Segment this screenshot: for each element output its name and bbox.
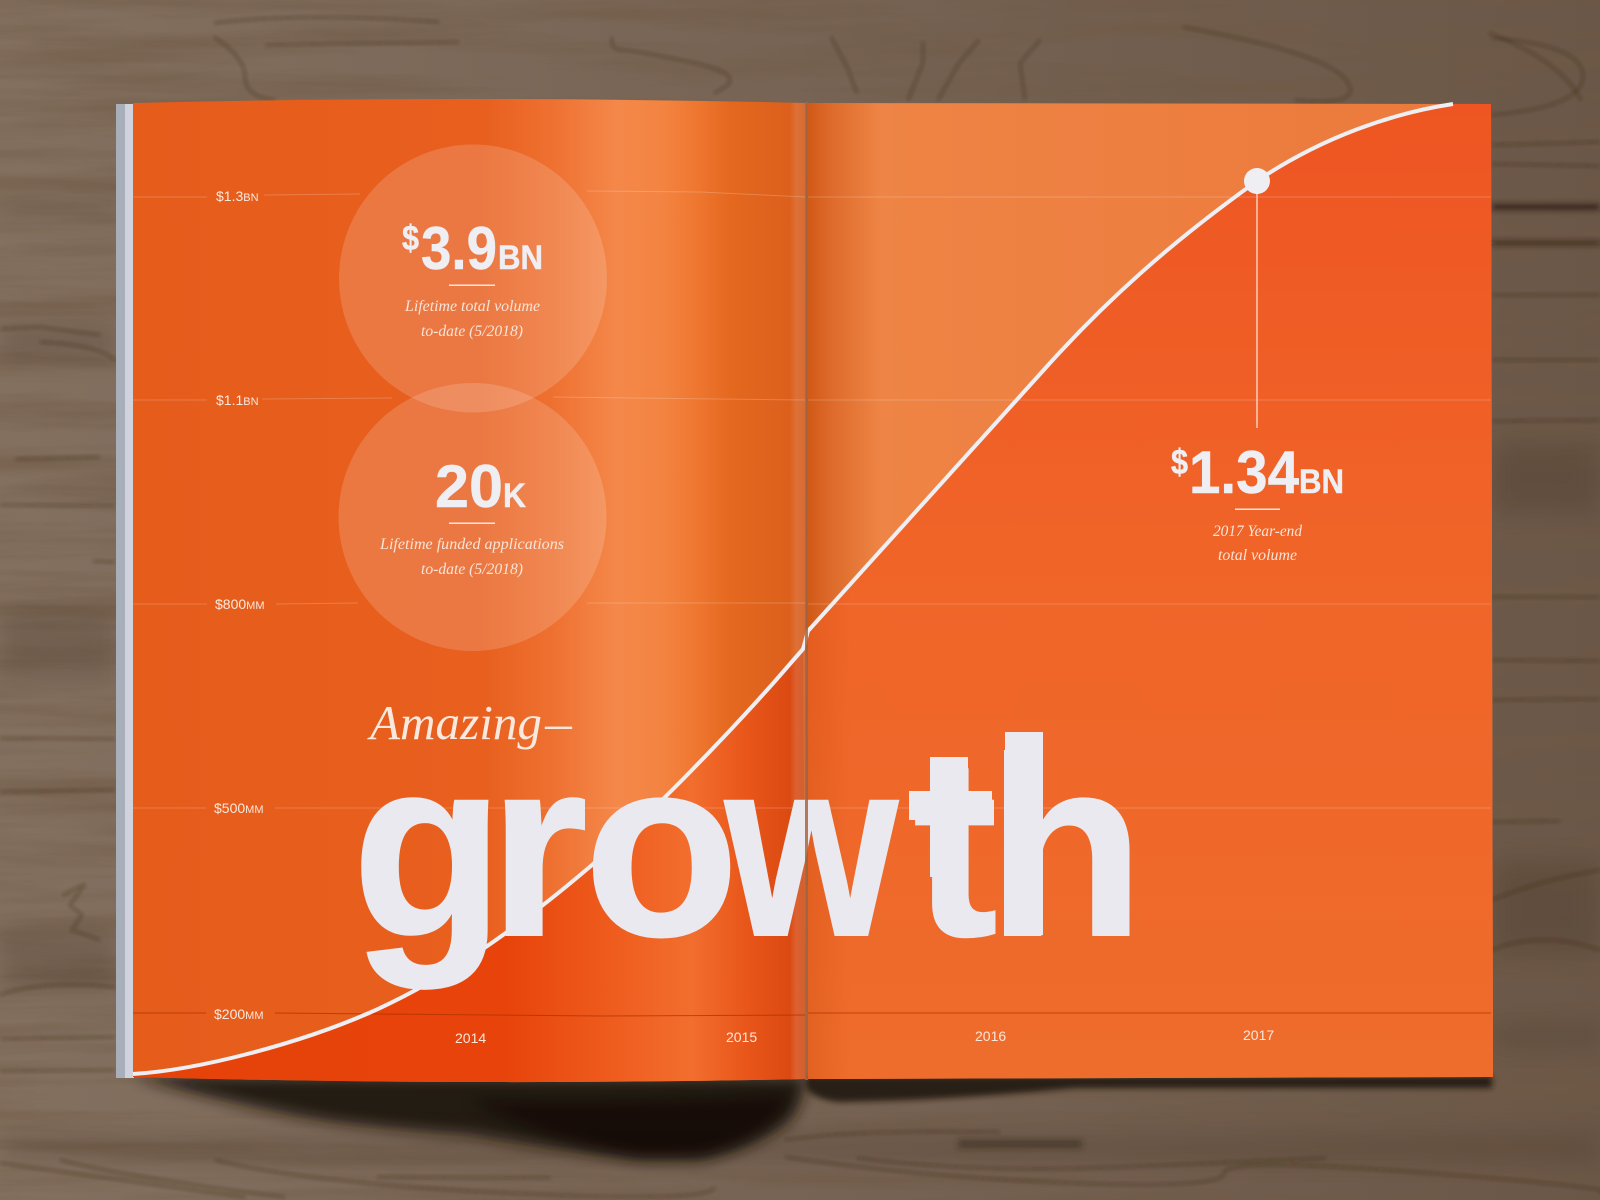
heading: growth: r (489, 705, 588, 989)
stat: $3.9BN lifetime total volume: 3.9 (421, 215, 497, 282)
stat: $3.9BN lifetime total volume: $ (402, 219, 419, 258)
heading: Amazing: — (544, 695, 572, 750)
circle: lifetime funded applications (338, 383, 606, 651)
circle: lifetime total volume (339, 144, 607, 412)
stat: $1.34BN 2017 year-end total volume: $ (1171, 443, 1188, 482)
right page (806, 100, 1500, 1085)
y axis labels: $1.3BN (216, 188, 259, 204)
shadow under the spread (133, 1076, 1492, 1160)
x axis year labels: 2016 (975, 1028, 1006, 1044)
stat: 20K lifetime funded applications: 20 (435, 453, 503, 520)
heading: growth: g (352, 706, 504, 990)
stat: $1.34BN 2017 year-end total volume (1171, 439, 1344, 564)
curve marker dot and stem (1244, 168, 1270, 428)
right page area below curve (808, 100, 1500, 1085)
stat: $1.34BN 2017 year-end total volume: 1.34 (1189, 439, 1300, 506)
stat: 20K lifetime funded applications: Lifetime funded applications (379, 536, 564, 553)
heading: growth: h (987, 706, 1144, 990)
heading: growth (352, 705, 1144, 990)
stat: $3.9BN lifetime total volume: Lifetime total volume (404, 298, 540, 315)
x axis year labels: 2017 (1243, 1027, 1274, 1043)
x axis year labels: 2015 (726, 1029, 757, 1045)
right page background above curve (806, 100, 1496, 1085)
left page area below curve (133, 649, 806, 1090)
stat: $1.34BN 2017 year-end total volume: 2017 Year-end (1213, 523, 1303, 540)
x axis year labels (455, 1027, 1274, 1046)
horizontal grid lines (133, 191, 1491, 1016)
heading: Amazing: Amazing (367, 695, 542, 750)
y axis labels: $200MM (214, 1006, 263, 1022)
gutter shading on right page above curve (808, 103, 866, 628)
left page background above curve (133, 90, 807, 1090)
heading: growth: t (913, 705, 998, 989)
heading: growth: o (584, 705, 739, 989)
stat: 20K lifetime funded applications: K (503, 477, 526, 515)
y axis labels (214, 188, 264, 1022)
x axis year labels: 2014 (455, 1030, 486, 1046)
stat: $1.34BN 2017 year-end total volume: total volume (1218, 547, 1297, 564)
binding strip (116, 104, 134, 1078)
stat: $3.9BN lifetime total volume: to-date (5/2018) (421, 323, 523, 340)
growth curve line (133, 104, 1453, 1074)
stat: $3.9BN lifetime total volume: BN (498, 239, 543, 277)
spine gutter line (805, 102, 808, 1080)
y axis labels: $800MM (215, 596, 264, 612)
stat: 20K lifetime funded applications: to-date (5/2018) (421, 561, 523, 578)
stat: 20K lifetime funded applications (379, 453, 564, 578)
stat: $1.34BN 2017 year-end total volume: BN (1299, 463, 1344, 501)
y axis labels: $500MM (214, 800, 263, 816)
gutter shading on right page below curve (808, 621, 820, 1079)
heading: growth: w (724, 705, 899, 989)
y axis labels: $1.1BN (216, 392, 259, 408)
left page (133, 90, 807, 1090)
stat: $3.9BN lifetime total volume (402, 215, 543, 340)
